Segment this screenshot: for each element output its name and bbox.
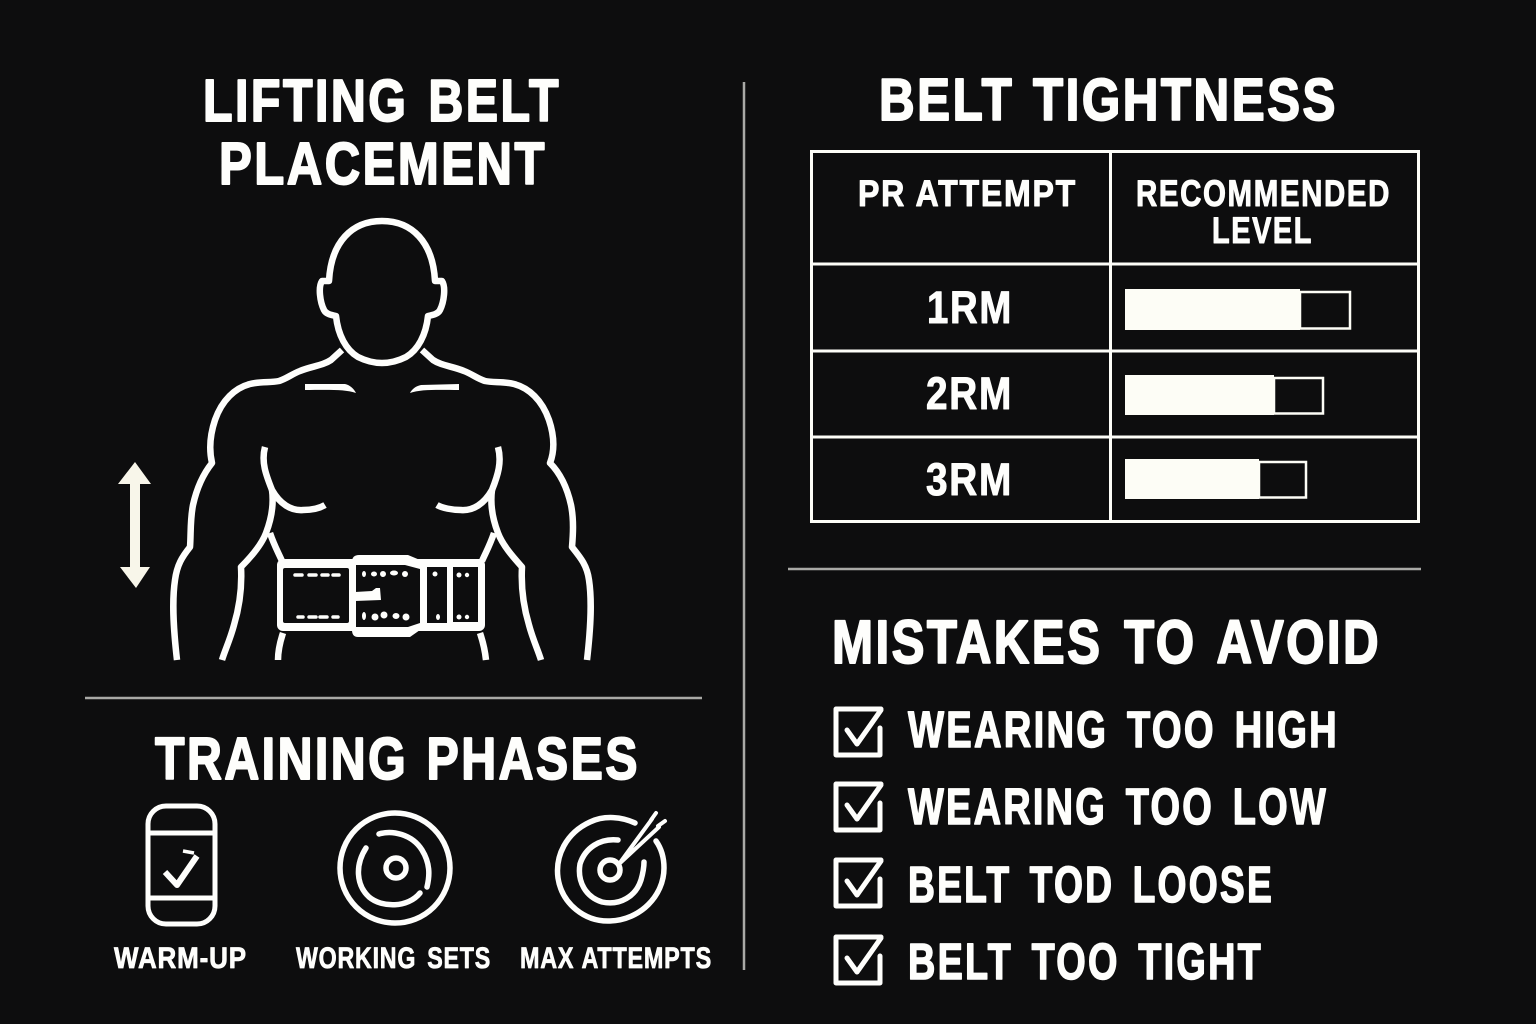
- icon: phone with check: [148, 806, 215, 924]
- head: [320, 221, 444, 363]
- label: working sets: WORKING SETS: [296, 942, 491, 975]
- row: 2RM: 2RM: [926, 368, 1013, 419]
- row: 3RM: 3RM: [926, 454, 1013, 505]
- label: warm-up: WARM-UP: [114, 942, 247, 975]
- item: belt too loose: [836, 856, 1274, 913]
- clavicles: [305, 384, 356, 393]
- icon: weight plate: [340, 813, 450, 923]
- heading: belt tightness: BELT TIGHTNESS: [879, 67, 1338, 133]
- title: lifting belt placement: [203, 68, 561, 197]
- checklist: mistakes: [836, 701, 1339, 990]
- phase: working sets: [296, 813, 491, 975]
- bar: 1RM level: [1125, 289, 1350, 330]
- figure: torso outline with belt: [173, 221, 591, 660]
- heading: mistakes to avoid: MISTAKES TO AVOID: [832, 608, 1381, 676]
- label: max attempts: MAX ATTEMPTS: [520, 942, 712, 975]
- row: 2RM: [926, 368, 1323, 419]
- item: wearing too high: WEARING TOO HIGH: [908, 701, 1339, 758]
- heading: training phases: TRAINING PHASES: [155, 726, 640, 792]
- item: belt too tight: [836, 933, 1263, 990]
- belt: [277, 555, 485, 637]
- column header: recommended level: [1136, 173, 1391, 251]
- row: 1RM: [927, 282, 1350, 333]
- item: belt too loose: BELT TOD LOOSE: [908, 856, 1274, 913]
- phase: max attempts: [520, 813, 712, 975]
- column header: PR attempt: PR ATTEMPT: [858, 173, 1077, 214]
- icon: target with dart: [558, 813, 665, 921]
- bar: 3RM level: [1125, 459, 1306, 499]
- phase: warm-up: [114, 806, 247, 975]
- table: belt tightness levels: [811, 151, 1419, 522]
- arrow: up and down adjustment: [118, 462, 151, 588]
- body left side: [173, 350, 342, 660]
- body right side: [422, 350, 591, 660]
- bar: 2RM level: [1125, 375, 1323, 415]
- item: belt too tight: BELT TOO TIGHT: [908, 933, 1263, 990]
- title: lifting belt placement: PLACEMENT: [219, 131, 547, 197]
- item: wearing too low: WEARING TOO LOW: [908, 778, 1328, 835]
- row: 3RM: [926, 454, 1306, 505]
- item: wearing too high: [836, 701, 1339, 758]
- row: 1RM: 1RM: [927, 282, 1013, 333]
- column header: recommended level: RECOMMENDED: [1136, 173, 1391, 214]
- column header: recommended level: LEVEL: [1212, 210, 1313, 251]
- title: lifting belt placement: LIFTING BELT: [203, 68, 561, 134]
- item: wearing too low: [836, 778, 1328, 835]
